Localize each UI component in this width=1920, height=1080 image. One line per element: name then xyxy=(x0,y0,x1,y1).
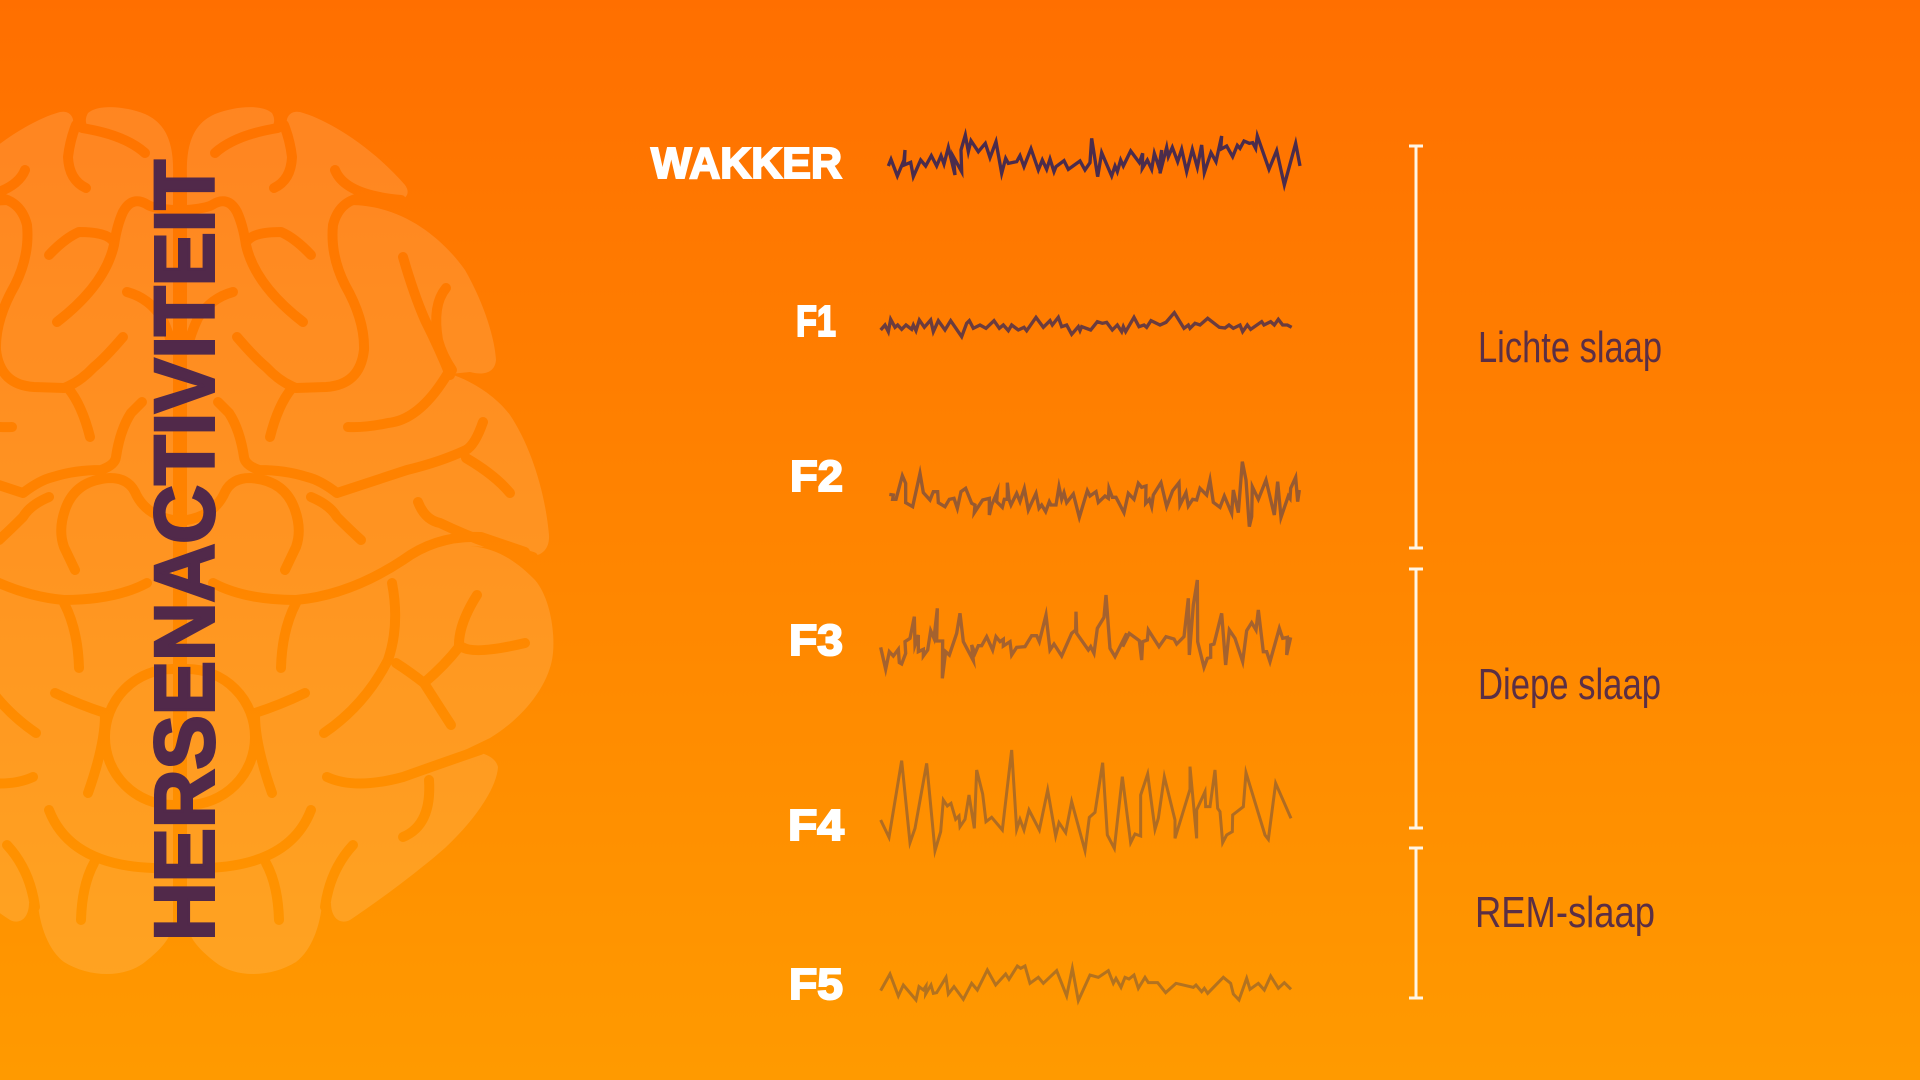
brain wave: F2 xyxy=(889,462,1299,527)
brain wave: F3 xyxy=(881,580,1291,678)
brain wave: F4 xyxy=(881,750,1291,851)
brain wave: F1 xyxy=(881,313,1292,337)
bracket: diepe slaap xyxy=(1409,569,1423,828)
brain wave: WAKKER xyxy=(888,135,1300,185)
brain wave: F5 xyxy=(881,966,1291,1001)
bracket: lichte slaap xyxy=(1409,146,1423,548)
bracket: REM-slaap xyxy=(1409,848,1423,998)
label: F4: F4 xyxy=(788,801,845,850)
label: WAKKER: WAKKER xyxy=(651,139,842,188)
label: F5: F5 xyxy=(789,960,843,1009)
hemisphere silhouette xyxy=(187,107,553,974)
side label: REM-slaap: REM-slaap xyxy=(1475,888,1655,937)
right hemisphere xyxy=(187,107,553,974)
left hemisphere (mirror) xyxy=(0,107,173,974)
side label: Diepe slaap: Diepe slaap xyxy=(1478,660,1661,709)
brain illustration xyxy=(0,107,553,974)
label: F2: F2 xyxy=(790,452,843,501)
vertical title: HERSENACTIVITEIT xyxy=(138,160,232,941)
side label: Lichte slaap: Lichte slaap xyxy=(1478,323,1662,372)
label: F1: F1 xyxy=(796,297,836,346)
brain sulci lines xyxy=(187,125,533,920)
label: F3: F3 xyxy=(789,616,843,665)
